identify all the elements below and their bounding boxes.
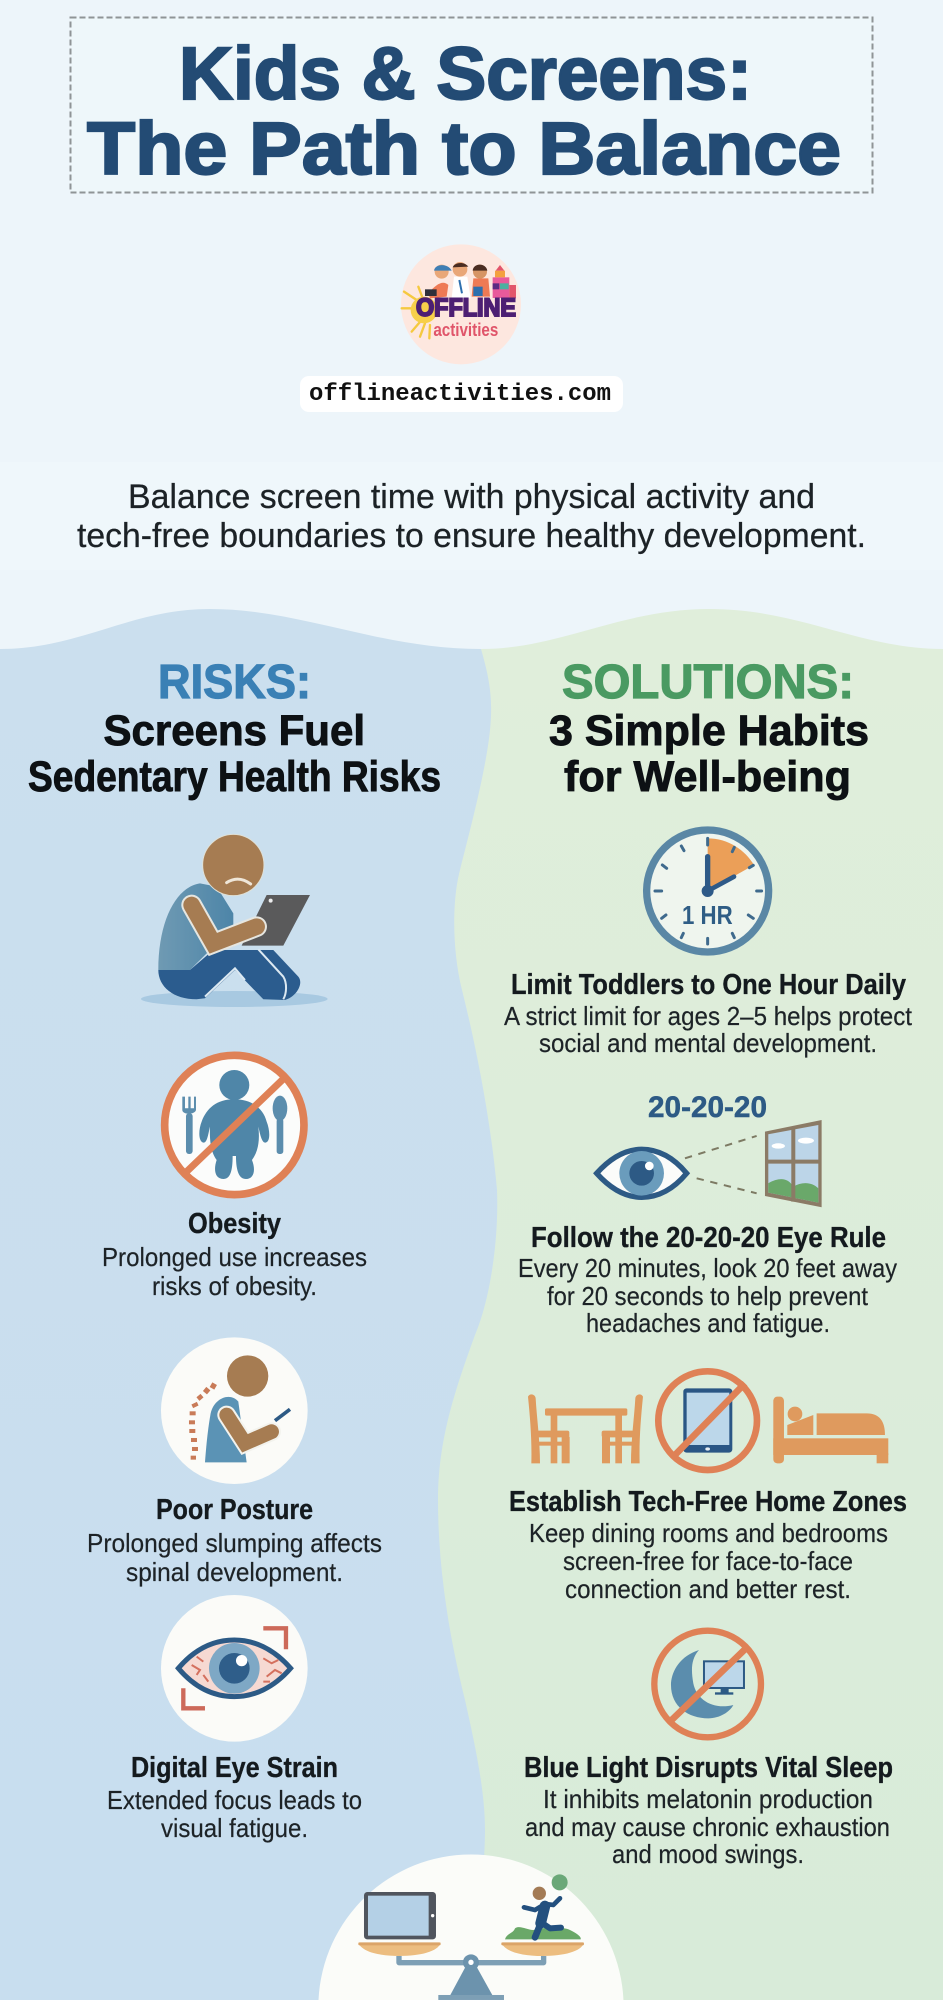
text: tech-free zones <box>509 1486 907 1604</box>
heading: risks <box>28 656 441 801</box>
text: poor posture: Poor Posture <box>156 1494 313 1526</box>
text: digital eye strain: visual fatigue. <box>161 1813 308 1843</box>
text: obesity: Prolonged use increases <box>102 1242 367 1272</box>
icon: clock 1 hour: 1 HR <box>682 900 733 930</box>
text: limit toddlers: Limit Toddlers to One Hour Daily <box>511 969 906 1001</box>
title: The Path to Balance <box>87 107 841 190</box>
text: blue light: and may cause chronic exhaustion <box>525 1812 890 1842</box>
text: poor posture: Prolonged slumping affects <box>87 1528 382 1558</box>
title <box>70 18 872 192</box>
text: digital eye strain <box>107 1752 362 1843</box>
logo: offline activities: OFFLINE <box>416 294 516 322</box>
heading: solutions: 3 Simple Habits <box>549 707 869 755</box>
logo: offline activities: activities <box>433 319 498 340</box>
text: 20-20-20 eye rule: Follow the 20-20-20 Eye Rule <box>531 1222 886 1254</box>
text: 20-20-20 eye rule <box>518 1222 897 1338</box>
text: obesity: Obesity <box>188 1208 281 1240</box>
text: digital eye strain: Extended focus leads to <box>107 1785 362 1815</box>
text: 20-20-20 eye rule: for 20 seconds to help prevent <box>547 1281 869 1311</box>
icon: tech-free zones <box>528 1371 888 1470</box>
text: obesity: risks of obesity. <box>152 1271 317 1301</box>
text: obesity <box>102 1208 367 1301</box>
intro text: Balance screen time with physical activity and <box>128 478 815 516</box>
icon label: 20-20-20: 20-20-20 <box>648 1091 767 1124</box>
text: tech-free zones: Keep dining rooms and bedrooms <box>529 1518 888 1548</box>
icon: blue light and sleep <box>654 1631 761 1737</box>
text: poor posture: spinal development. <box>126 1557 343 1587</box>
text: limit toddlers: social and mental development. <box>539 1028 877 1058</box>
text: tech-free zones: screen-free for face-to-face <box>563 1546 853 1576</box>
icon: strained eye <box>161 1595 308 1742</box>
panel: risks background <box>0 609 497 2000</box>
heading: solutions <box>549 656 869 801</box>
icon: poor posture <box>161 1337 308 1484</box>
text: poor posture <box>87 1494 382 1587</box>
text: blue light: and mood swings. <box>612 1839 804 1869</box>
text: limit toddlers: A strict limit for ages 2–5 helps protect <box>504 1001 913 1031</box>
text: blue light: It inhibits melatonin production <box>543 1784 873 1814</box>
intro text: tech-free boundaries to ensure healthy development. <box>77 517 866 555</box>
text: 20-20-20 eye rule: headaches and fatigue. <box>586 1308 830 1338</box>
text: 20-20-20 eye rule: Every 20 minutes, look 20 feet away <box>518 1253 897 1283</box>
intro text <box>77 478 866 555</box>
icon: clock 1 hour <box>647 830 769 952</box>
heading: risks: RISKS: <box>158 656 311 709</box>
logo: offline activities <box>401 244 521 364</box>
title: Kids & Screens: <box>179 32 752 115</box>
text: limit toddlers <box>504 969 913 1058</box>
text: blue light <box>524 1752 893 1869</box>
panel: solutions background <box>400 609 943 2000</box>
heading: solutions: SOLUTIONS: <box>562 656 854 709</box>
text: blue light: Blue Light Disrupts Vital Sleep <box>524 1752 893 1784</box>
icon: balance scale <box>318 1854 623 2000</box>
heading: risks: Sedentary Health Risks <box>28 753 441 801</box>
icon: obesity prohibited <box>165 1055 304 1195</box>
text: tech-free zones: connection and better rest. <box>565 1574 851 1604</box>
heading: risks: Screens Fuel <box>104 707 365 755</box>
icon: child slumped over tablet <box>141 834 328 1007</box>
heading: solutions: for Well-being <box>564 753 851 801</box>
icon: eye looking at window <box>597 1120 822 1207</box>
website label: offlineactivities.com <box>309 381 611 408</box>
text: digital eye strain: Digital Eye Strain <box>131 1752 338 1784</box>
